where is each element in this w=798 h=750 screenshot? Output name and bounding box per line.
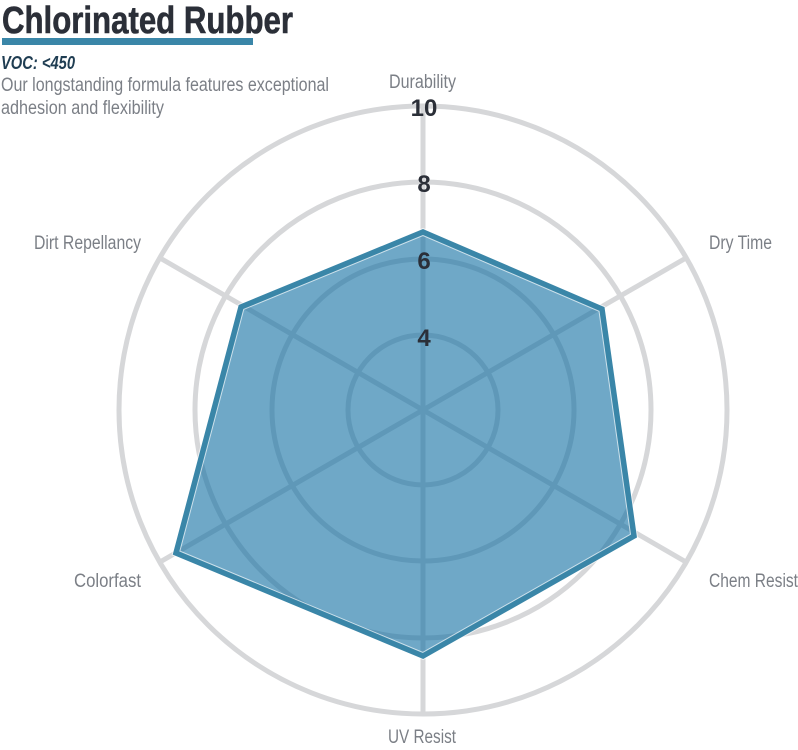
axis labels: Colorfast: [74, 571, 142, 592]
scale numbers: 8: [417, 171, 431, 198]
radar grid: [119, 106, 727, 714]
axis labels: Durability: [389, 72, 456, 93]
axis labels: Dirt Repellancy: [34, 233, 141, 254]
scale numbers: 4: [417, 325, 431, 352]
description: adhesion and flexibility: [1, 98, 164, 119]
title: Chlorinated Rubber: [2, 0, 293, 42]
title underline: [2, 38, 253, 45]
axis labels: UV Resist: [388, 727, 457, 748]
description: Our longstanding formula features exceptional: [1, 75, 329, 96]
scale numbers: 10: [411, 95, 437, 122]
scale numbers: 6: [417, 248, 431, 275]
description: [1, 75, 329, 119]
axis labels: Dry Time: [709, 233, 772, 254]
scale numbers: [411, 95, 437, 352]
VOC rating: VOC: <450: [1, 53, 75, 73]
data polygon: [176, 232, 634, 656]
